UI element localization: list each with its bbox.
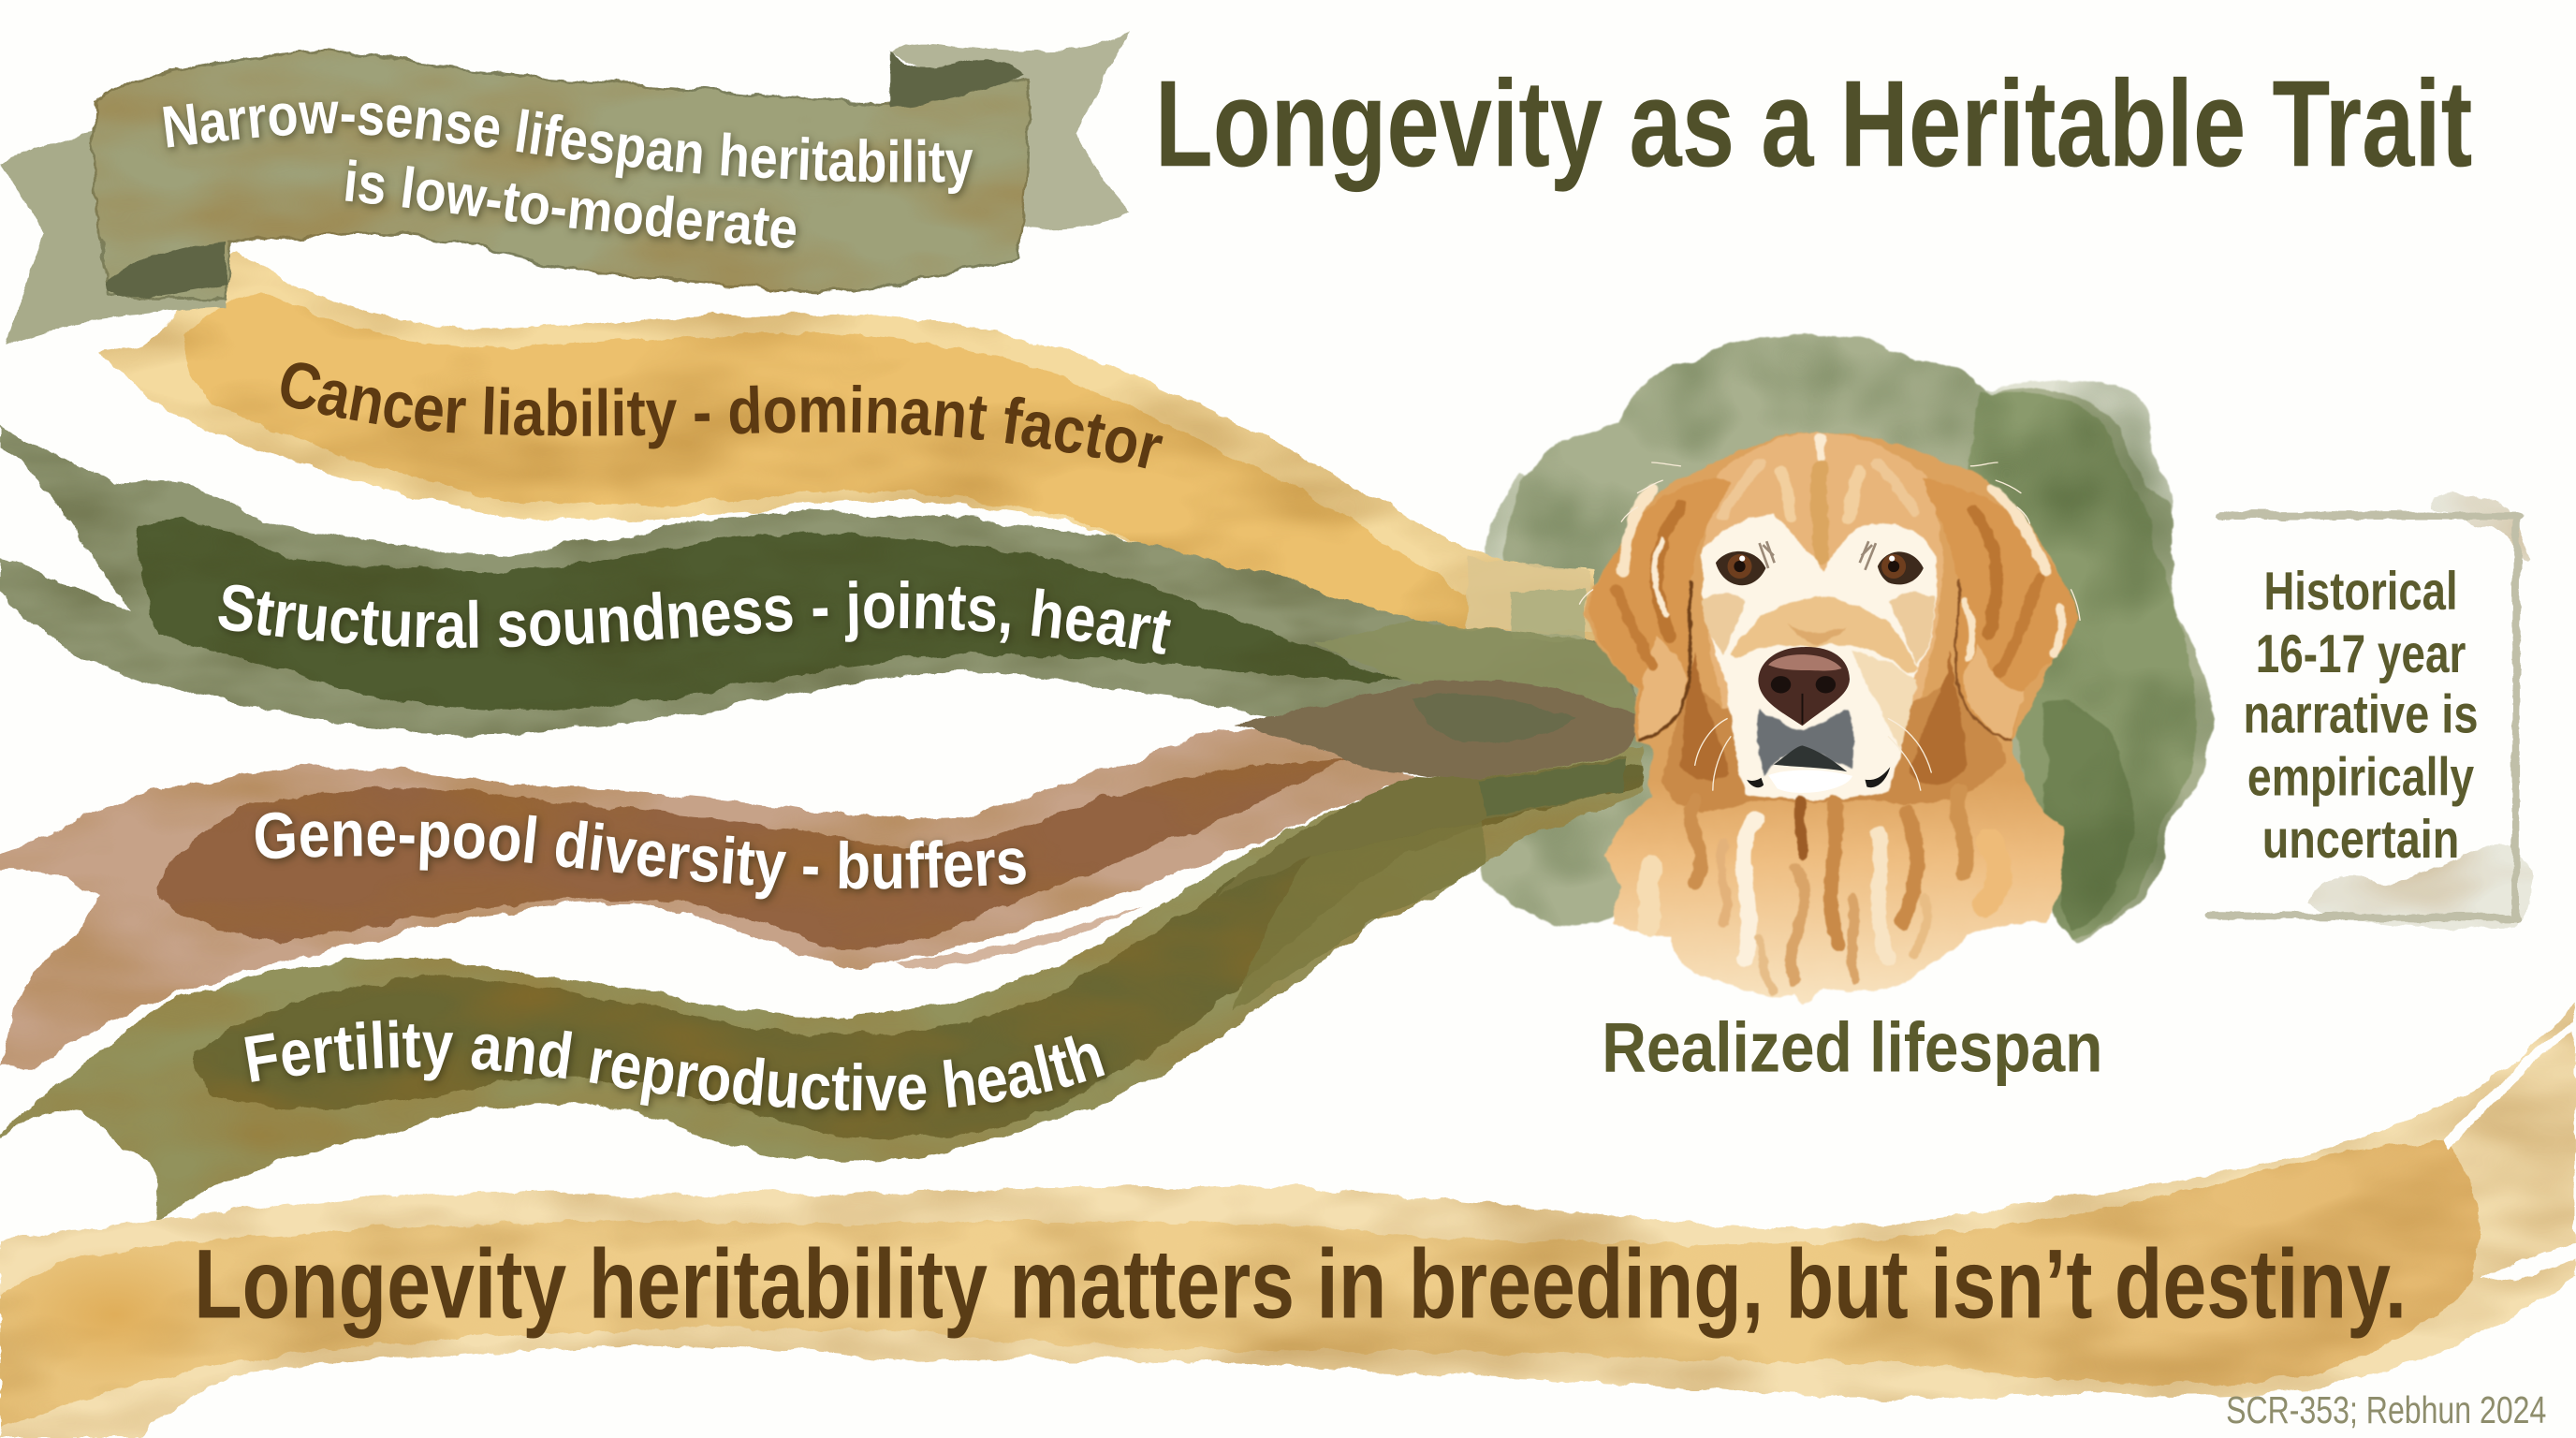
dog mouth <box>1747 745 1890 793</box>
bottom watercolor banner <box>0 1005 2576 1438</box>
callout frame: historical narrative <box>2210 493 2532 929</box>
dog left eye <box>1716 541 1775 585</box>
ribbon line 2: is low-to-moderate <box>343 159 801 255</box>
ribbon body <box>95 50 1029 299</box>
callout text: Historical <box>2263 562 2458 622</box>
ribbon right tail <box>890 30 1131 228</box>
dog head tan <box>1704 432 1942 708</box>
stream: olive fertility <box>0 748 1643 1224</box>
dog face mask <box>1702 514 1937 799</box>
label: structural soundness: Structural soundness - joints, heart <box>218 580 1173 658</box>
green watercolor blob behind dog <box>1478 335 2209 945</box>
ear and head streaks <box>1616 437 2062 741</box>
stream: dark green structural soundness <box>0 424 1643 740</box>
ribbon right fold <box>890 52 1022 109</box>
label: fertility and reproductive health: Fertility and reproductive health <box>244 1020 1109 1116</box>
dog left ear <box>1589 478 1731 739</box>
ribbon left fold <box>107 242 225 298</box>
dog chest fur <box>1648 790 1999 990</box>
icon: golden retriever portrait <box>1579 432 2080 1005</box>
ear lobes light <box>1638 637 2025 739</box>
dog right eye <box>1860 541 1924 584</box>
dog muzzle tan <box>1731 597 1917 671</box>
dog grey beard <box>1758 708 1853 774</box>
callout text: uncertain <box>2262 810 2459 870</box>
callout text: empirically <box>2247 747 2474 807</box>
label: gene-pool diversity: Gene-pool diversity - buffers <box>253 811 1032 905</box>
stream: brown gene-pool diversity <box>0 726 1421 1068</box>
dog nose <box>1758 647 1850 726</box>
dog fur painting <box>1584 432 2078 1005</box>
label: cancer liability: Cancer liability - dominant factor <box>281 362 1163 468</box>
frame stains <box>2308 493 2532 929</box>
dog below-eye tan <box>1702 594 1745 654</box>
ribbon left tail <box>0 131 225 345</box>
stream convergence near dog <box>1218 555 1636 1010</box>
header ribbon <box>0 31 1130 345</box>
ribbon line 1: Narrow-sense lifespan heritability <box>161 101 977 200</box>
dog neck <box>1662 680 2007 812</box>
dog caption: Realized lifespan <box>1602 1007 2102 1086</box>
callout text <box>2244 562 2479 870</box>
dog right ear <box>1921 478 2078 741</box>
stream: gold cancer liability <box>98 250 1602 649</box>
dog silhouette <box>1584 432 2078 1005</box>
flowing contributor streams <box>0 250 1643 1224</box>
callout text: narrative is <box>2244 685 2479 745</box>
dog whiskers and wisps <box>1579 462 2080 790</box>
frame strokes <box>2210 516 2519 918</box>
callout text: 16-17 year <box>2256 624 2466 684</box>
